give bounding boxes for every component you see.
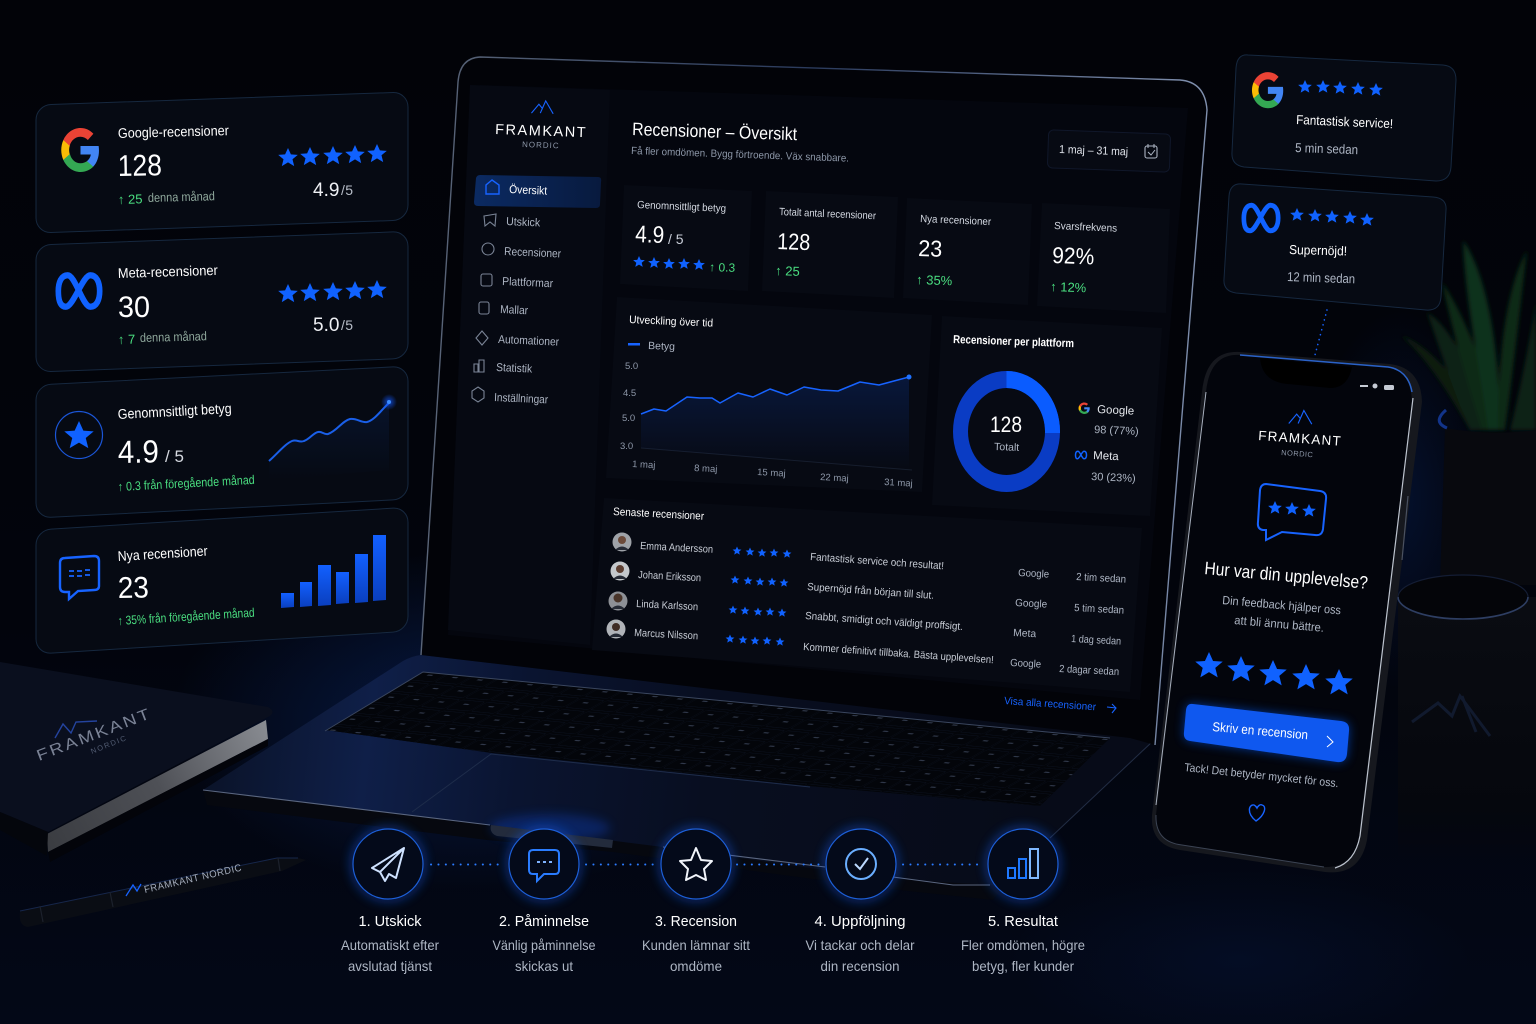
nav menu: Plattformar: [502, 276, 553, 290]
right review card: Meta: Supernöjd!: [1289, 242, 1347, 259]
step 3: [642, 829, 750, 974]
recent reviews table: Emma Andersson: [640, 540, 714, 556]
left stat card: Google: denna månad: [148, 189, 215, 205]
review row stars: [726, 546, 791, 646]
nav menu: [472, 175, 601, 406]
line chart panel: [606, 297, 932, 492]
phone stars: [1195, 652, 1353, 694]
line chart panel: 22 maj: [820, 472, 849, 484]
KPI: average rating: Genomnsittligt betyg: [637, 199, 726, 215]
step 2: skickas ut: [515, 958, 573, 974]
recent reviews table: Snabbt, smidigt och väldigt proffsigt.: [805, 610, 963, 633]
KPI: response rate: ↑ 12%: [1050, 279, 1087, 295]
nav menu: Utskick: [506, 216, 541, 229]
phone logo: FRAMKANT: [1258, 428, 1344, 449]
phone review icon: [1258, 484, 1326, 540]
notebook logo: NORDIC: [89, 733, 129, 756]
recent reviews table: Kommer definitivt tillbaka. Bästa upplevelsen!: [803, 641, 994, 666]
recent reviews table: Johan Eriksson: [638, 569, 702, 584]
donut chart panel: 98 (77%): [1094, 424, 1139, 438]
recent reviews table: Google: [1018, 567, 1050, 581]
KPI: response rate: Svarsfrekvens: [1054, 220, 1117, 235]
line chart panel: 5.0: [625, 361, 638, 372]
line chart panel: 4.5: [623, 388, 636, 399]
phone logo: NORDIC: [1281, 448, 1314, 459]
mug with logo: [1398, 575, 1536, 860]
dotted connector: [1315, 310, 1327, 355]
KPI: average rating: / 5: [668, 231, 684, 247]
phone subtext: [1222, 593, 1342, 635]
left stat card: Meta: denna månad: [140, 329, 207, 345]
sidebar: [448, 85, 610, 645]
KPI: new reviews: ↑ 35%: [916, 272, 953, 288]
left stat card: average rating: / 5: [165, 447, 184, 466]
recent reviews table: 2 dagar sedan: [1059, 663, 1120, 678]
step 1: avslutad tjänst: [348, 958, 432, 974]
recent reviews table: Fantastisk service och resultat!: [810, 551, 944, 572]
line chart panel: 3.0: [620, 441, 633, 452]
left stat card: Google: ↑ 25: [118, 191, 143, 207]
step 4: Vi tackar och delar: [806, 937, 915, 953]
phone heart: [1249, 805, 1265, 821]
KPI: average rating: [620, 185, 752, 291]
step 5: [961, 829, 1085, 974]
trackpad: [412, 754, 810, 812]
recent reviews table: Google: [1010, 657, 1042, 671]
bar chart: [281, 535, 386, 608]
left stat card: Meta: Meta-recensioner: [118, 262, 218, 281]
recent reviews table: Marcus Nilsson: [634, 627, 699, 642]
avatars: [606, 532, 632, 638]
KPI: new reviews: Nya recensioner: [920, 213, 992, 228]
notebook: [0, 662, 273, 862]
step 4: 4. Uppföljning: [814, 913, 906, 930]
nav menu: Automationer: [498, 334, 559, 349]
KPI: total reviews: ↑ 25: [775, 263, 800, 279]
KPI: total reviews: [762, 191, 898, 298]
left stat card: Google: /5: [341, 182, 353, 198]
chat icon: [60, 556, 99, 599]
left stat card: new reviews: [36, 507, 408, 654]
step 5: Fler omdömen, högre: [961, 937, 1085, 953]
recent reviews table: Linda Karlsson: [636, 598, 699, 613]
KPI: new reviews: 23: [918, 235, 943, 262]
phone thanks: Tack! Det betyder mycket för oss.: [1184, 762, 1339, 790]
step 5: betyg, fler kunder: [972, 958, 1074, 974]
plant on right: [1400, 240, 1536, 430]
right review card: Google: [1232, 55, 1456, 181]
KPI: average rating: 4.9: [635, 221, 665, 249]
step 1: Automatiskt efter: [341, 937, 439, 953]
donut chart panel: [932, 316, 1162, 516]
left stat card: Google: 128: [118, 149, 162, 183]
pen: FRAMKANT NORDIC: [143, 863, 243, 896]
laptop screen: [421, 57, 1207, 745]
dashboard header: Recensioner – Översikt: [632, 119, 797, 144]
left stat card: Meta: 30: [118, 291, 150, 324]
phone heading: Hur var din upplevelse?: [1204, 558, 1369, 593]
phone button: Skriv en recension: [1212, 719, 1309, 742]
step 3: omdöme: [670, 958, 722, 974]
left stat card: new reviews: 23: [118, 571, 149, 605]
recent reviews table: Senaste recensioner: [613, 506, 705, 523]
process timeline: [341, 829, 1085, 974]
KPI: total reviews: Totalt antal recensioner: [779, 206, 877, 222]
line chart panel: Betyg: [648, 340, 675, 353]
right review card: Meta: [1224, 184, 1446, 310]
line chart panel: 15 maj: [757, 467, 786, 479]
left stat card: Meta: 5.0: [313, 315, 339, 336]
right review card: Google: 5 min sedan: [1295, 140, 1358, 157]
nav menu: Översikt: [509, 184, 548, 198]
date picker: [1047, 130, 1171, 172]
phone subtext: att bli ännu bättre.: [1234, 613, 1325, 635]
recent reviews table: 2 tim sedan: [1076, 571, 1127, 586]
recent reviews table: 1 dag sedan: [1071, 633, 1122, 648]
line chart panel: 8 maj: [694, 463, 718, 475]
phone body: [1152, 352, 1422, 872]
left stat card: new reviews: Nya recensioner: [117, 543, 208, 564]
see all link: Visa alla recensioner: [1004, 695, 1097, 713]
left stat card: Meta: ↑ 7: [118, 332, 135, 347]
step 4: din recension: [820, 958, 900, 974]
sparkline: [269, 394, 397, 480]
KPI: response rate: [1037, 203, 1170, 313]
step 2: 2. Påminnelse: [499, 913, 589, 930]
line chart panel: 1 maj: [632, 459, 656, 471]
phone: [1152, 352, 1422, 872]
nav menu: Inställningar: [494, 392, 548, 406]
recent reviews table: Google: [1015, 597, 1048, 611]
hinge notch: [490, 814, 613, 848]
pen: [20, 858, 306, 927]
line chart panel: 31 maj: [884, 477, 913, 489]
recent reviews table: Meta: [1013, 627, 1037, 640]
KPI: new reviews: [903, 198, 1032, 305]
donut chart panel: Meta: [1093, 450, 1120, 463]
line chart panel: Utveckling över tid: [629, 314, 713, 330]
dashboard header: Få fler omdömen. Bygg förtroende. Väx snabbare.: [631, 145, 849, 165]
KPI: total reviews: 128: [777, 228, 811, 255]
step 3: 3. Recension: [655, 913, 737, 930]
status icons: [1360, 384, 1394, 390]
step 2: [492, 829, 596, 974]
nav menu: Statistik: [496, 362, 533, 376]
left stat card: average rating: 4.9: [117, 433, 159, 470]
timeline connectors: [431, 864, 983, 866]
donut chart panel: 128: [990, 412, 1022, 437]
recent reviews table: [592, 498, 1142, 713]
phone logo: [1258, 411, 1344, 459]
brand logo: [495, 101, 588, 150]
left stat card: Google: [36, 92, 408, 233]
plant pot: [1439, 410, 1536, 585]
left stat card: average rating: ↑ 0.3 från föregående månad: [117, 473, 255, 494]
step 1: [341, 829, 439, 974]
step 2: Vänlig påminnelse: [492, 937, 596, 953]
date picker: 1 maj – 31 maj: [1059, 144, 1128, 158]
left stat card: Meta: [36, 231, 408, 372]
left stat card: Google: Google-recensioner: [118, 122, 229, 141]
donut chart panel: Recensioner per plattform: [953, 334, 1074, 350]
phone notch: [1260, 358, 1352, 388]
step 4: [806, 829, 915, 974]
donut chart panel: 30 (23%): [1091, 471, 1136, 485]
step 3: Kunden lämnar sitt: [642, 937, 750, 953]
brand logo: FRAMKANT: [495, 122, 588, 141]
left stat card: Google: 4.9: [313, 180, 339, 201]
recent reviews table: Supernöjd från början till slut.: [807, 581, 934, 602]
step 5: 5. Resultat: [988, 913, 1059, 930]
donut chart panel: Totalt: [994, 441, 1019, 454]
dashboard header: [631, 119, 849, 165]
left stat card: Meta: /5: [341, 317, 353, 333]
phone button: [1184, 704, 1349, 762]
right review card: Meta: 12 min sedan: [1287, 269, 1355, 286]
brand logo: NORDIC: [522, 140, 560, 150]
phone subtext: Din feedback hjälper oss: [1222, 593, 1342, 617]
right review card: Google: Fantastisk service!: [1296, 112, 1393, 131]
laptop base with keyboard: [203, 655, 1155, 900]
line chart panel: 5.0: [622, 413, 635, 424]
KPI: average rating: ↑ 0.3: [709, 260, 736, 275]
recent reviews table: 5 tim sedan: [1074, 602, 1125, 617]
KPI: response rate: 92%: [1052, 242, 1095, 269]
left stat card: new reviews: ↑ 35% från föregående månad: [117, 606, 255, 628]
notebook logo: FRAMKANT: [34, 705, 154, 765]
left stat card: average rating: Genomnsittligt betyg: [117, 400, 232, 422]
nav menu: Recensioner: [504, 246, 561, 260]
nav menu: Mallar: [500, 304, 529, 317]
step 1: 1. Utskick: [358, 913, 422, 930]
left stat card: average rating: [36, 366, 408, 518]
donut chart panel: Google: [1097, 404, 1134, 418]
